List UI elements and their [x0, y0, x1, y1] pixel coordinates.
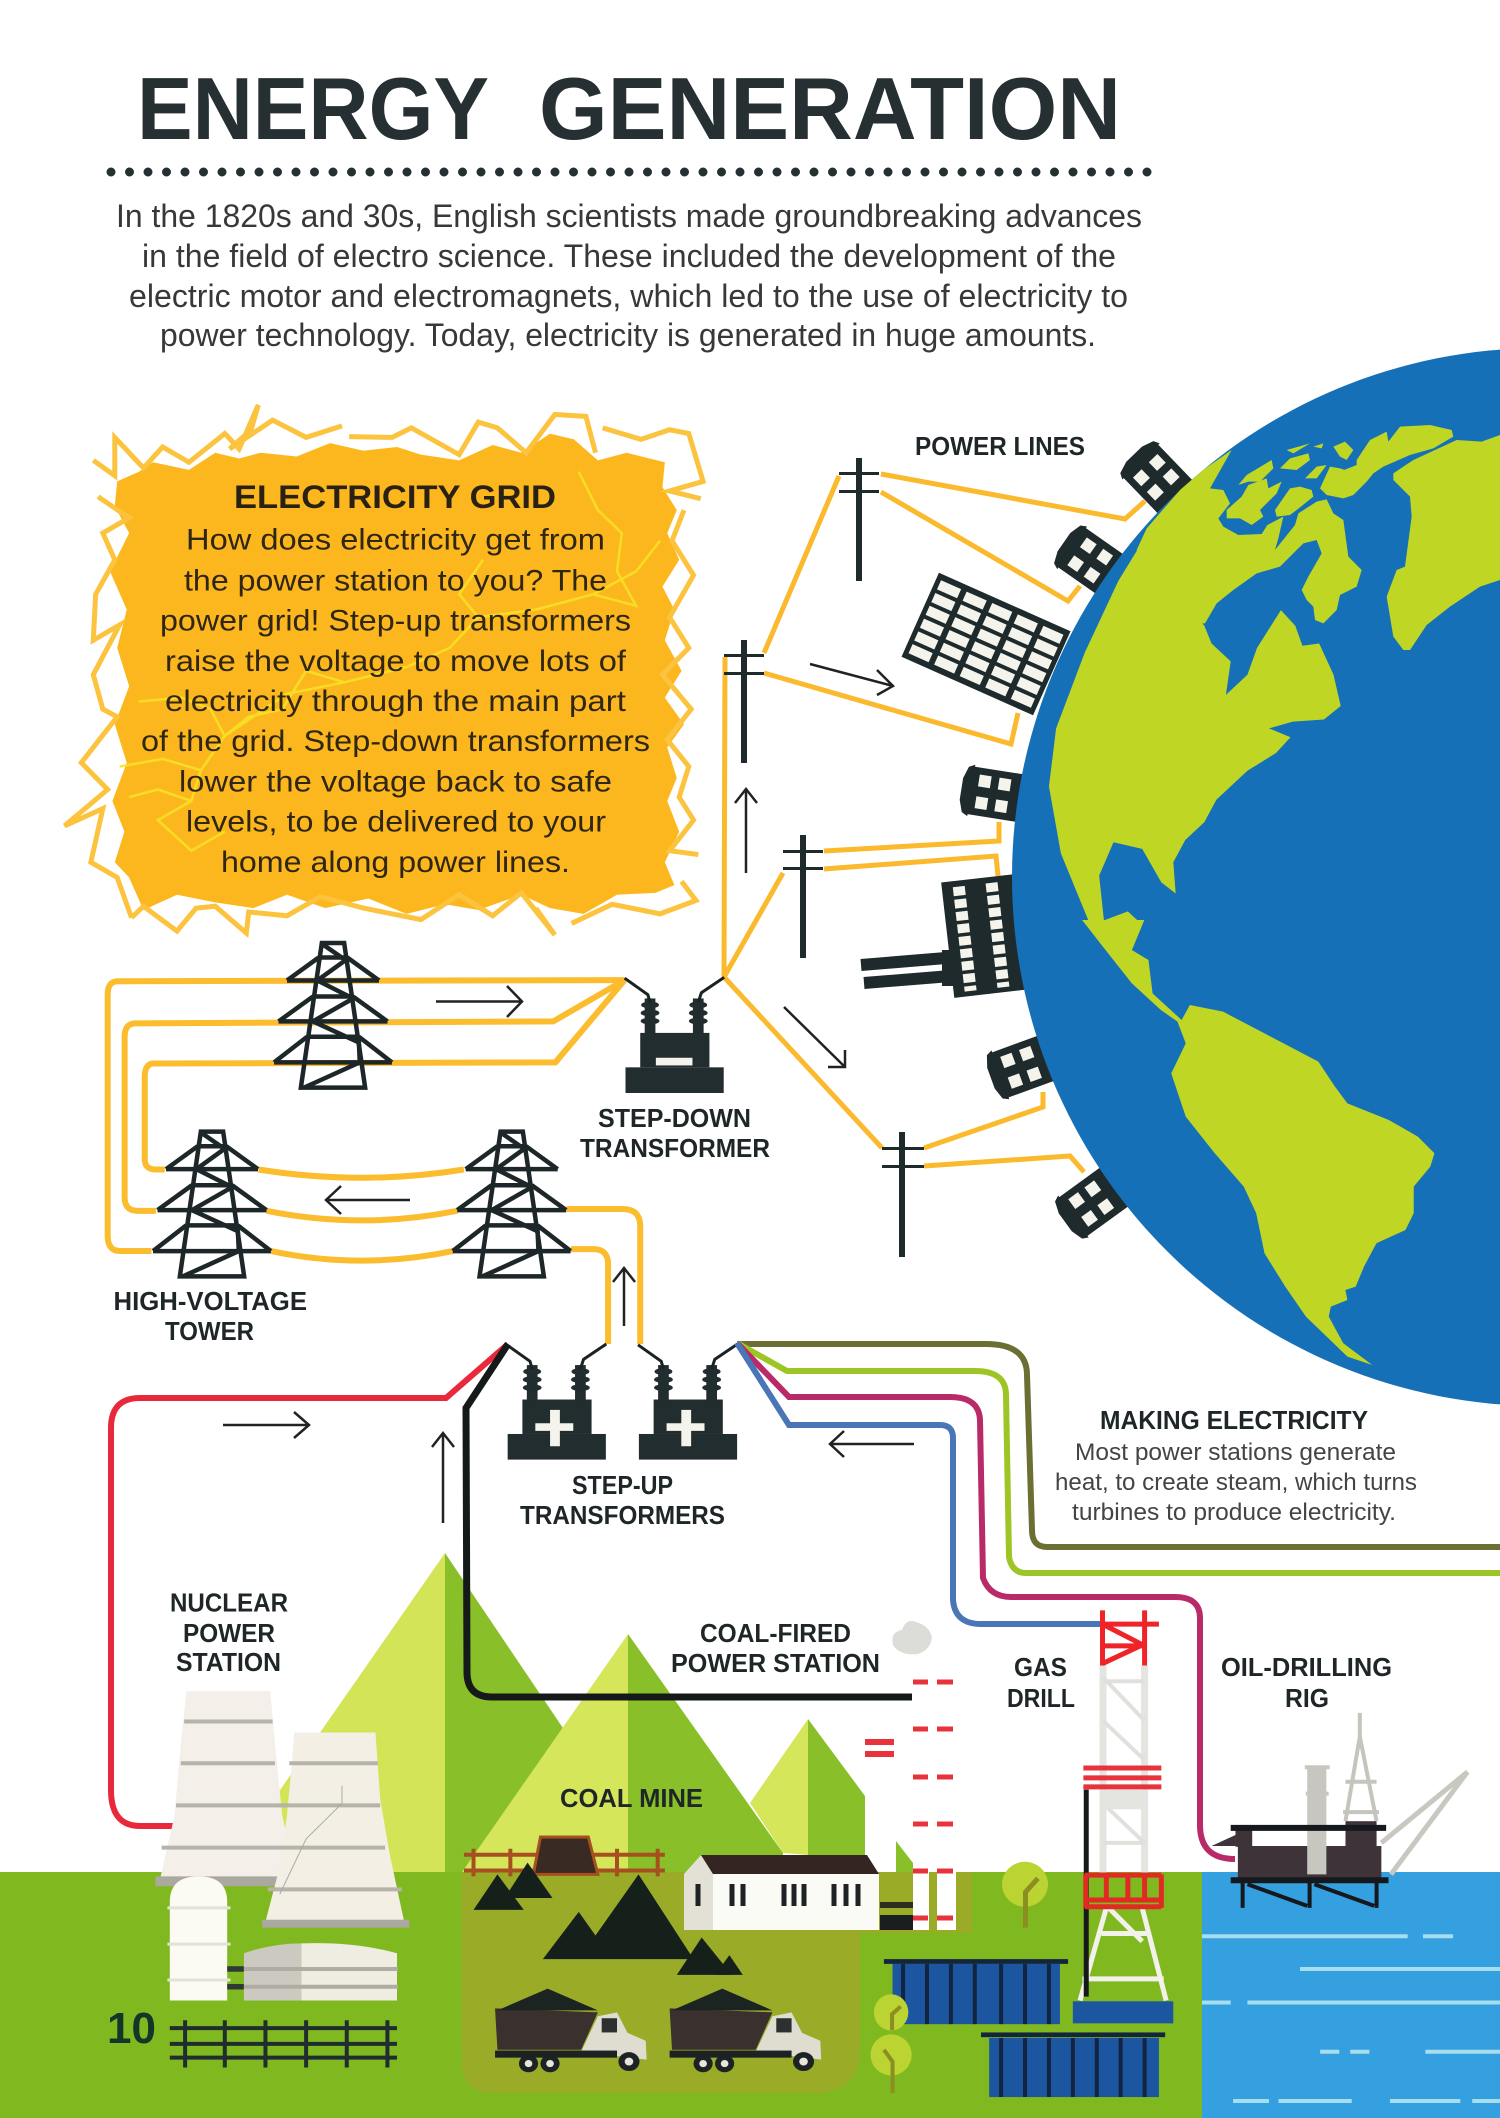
coal heaps: [474, 1863, 743, 1975]
gas drill and oil rig scene: [871, 1610, 1467, 2097]
icon: house 4: [982, 1033, 1057, 1103]
label: step-down transformer: [580, 1103, 770, 1163]
intro text: [116, 198, 1142, 353]
callout body: raise the voltage to move lots of: [165, 645, 627, 678]
title: ENERGY: [137, 59, 489, 158]
icon: house 5: [1050, 1166, 1130, 1243]
buildings around the globe: [861, 436, 1195, 1243]
label: nuclear power station: STATION: [176, 1647, 281, 1677]
chimney: [865, 1673, 956, 1930]
chimney column: [865, 1730, 894, 1856]
callout body: of the grid. Step-down transformers: [141, 725, 650, 758]
callout body: electricity through the main part: [165, 685, 627, 718]
smoke: [892, 1621, 932, 1654]
label: nuclear power station: [170, 1588, 288, 1677]
icon: step-up transformer 1: [507, 1344, 606, 1460]
icon: high-voltage tower 2: [153, 1132, 271, 1276]
Canada, Arctic islands and Greenland: [1137, 425, 1500, 650]
making electricity note: turbines to produce electricity.: [1072, 1499, 1396, 1526]
panel: electricity grid callout: [65, 405, 703, 935]
label: high-voltage tower: HIGH-VOLTAGE: [114, 1286, 307, 1316]
nuclear red line: [111, 1344, 508, 1826]
label: step-up transformers: TRANSFORMERS: [520, 1500, 725, 1530]
intro text: electric motor and electromagnets, which led to the use of electricity to: [129, 278, 1128, 314]
sea: [1202, 1872, 1500, 2118]
icon: office block: [902, 573, 1071, 716]
coal truck 1: [495, 1989, 647, 2072]
globe: [1012, 348, 1500, 1406]
making electricity note: Most power stations generate: [1075, 1439, 1396, 1466]
station building: [684, 1855, 913, 1930]
coal black line: [466, 1344, 912, 1697]
utility poles: [724, 458, 924, 1257]
coal mine ground: [462, 1872, 972, 2093]
label: coal-fired power station: POWER STATION: [671, 1648, 880, 1678]
label: power lines: POWER LINES: [915, 431, 1085, 461]
callout heading: ELECTRICITY GRID: [234, 479, 556, 515]
icon: factory: [861, 872, 1044, 998]
cooling tower back: [155, 1691, 297, 1886]
label: coal mine: COAL MINE: [560, 1783, 703, 1813]
intro text: in the field of electro science. These included the development of the: [142, 238, 1116, 274]
icon: house 3: [957, 763, 1026, 824]
blue line: [737, 1343, 1105, 1624]
icon: high-voltage tower 1: [274, 943, 392, 1088]
mountains: [223, 1553, 913, 1890]
making electricity note: [1055, 1405, 1417, 1526]
lightning box background: [65, 405, 703, 935]
making electricity note: MAKING ELECTRICITY: [1100, 1405, 1368, 1435]
label: step-up transformers: [520, 1470, 725, 1530]
mine shed: [533, 1837, 598, 1874]
label: nuclear power station: POWER: [183, 1618, 275, 1648]
callout body: lower the voltage back to safe: [179, 765, 612, 798]
container 1: [884, 1959, 1068, 2024]
silo: [167, 1876, 231, 2001]
oil rig: [1212, 1713, 1467, 1908]
icon: house 2: [1049, 521, 1129, 598]
gas drill tower: [1073, 1610, 1173, 2023]
tree 2: [874, 1994, 908, 2030]
arrows: [223, 664, 914, 1523]
page number: 10: [107, 2004, 156, 2053]
North America, lower mainland: [1049, 550, 1341, 948]
coal mine: [464, 1837, 821, 2072]
callout body: [141, 524, 650, 879]
tree 1: [1002, 1862, 1048, 1928]
label: high-voltage tower: TOWER: [165, 1316, 254, 1346]
label: coal-fired power station: [671, 1618, 880, 1678]
callout body: levels, to be delivered to your: [186, 806, 606, 839]
brown fence: [464, 1849, 665, 1876]
fence: [170, 2020, 397, 2068]
label: step-down transformer: TRANSFORMER: [580, 1133, 770, 1163]
title: GENERATION: [539, 59, 1121, 158]
label: gas drill: DRILL: [1007, 1683, 1075, 1713]
intro text: In the 1820s and 30s, English scientists made groundbreaking advances: [116, 198, 1142, 234]
callout body: How does electricity get from: [186, 524, 605, 556]
title: [137, 59, 1121, 158]
domed reactor building: [227, 1943, 398, 2001]
callout body: home along power lines.: [221, 846, 570, 879]
Central and South America: [1082, 920, 1434, 1365]
green line: [737, 1343, 1500, 1573]
label: high-voltage tower: [114, 1286, 307, 1346]
label: oil-drilling rig: [1221, 1652, 1392, 1713]
coal-fired power station: [684, 1621, 956, 1930]
label: gas drill: GAS: [1014, 1652, 1067, 1682]
icon: step-up transformer 2: [638, 1344, 738, 1460]
coal truck 2: [670, 1989, 821, 2072]
magenta line: [737, 1343, 1235, 1859]
callout body: power grid! Step-up transformers: [160, 605, 631, 638]
intro text: power technology. Today, electricity is generated in huge amounts.: [160, 317, 1096, 353]
olive line: [737, 1344, 1500, 1547]
label: coal-fired power station: COAL-FIRED: [700, 1618, 851, 1648]
label: step-up transformers: STEP-UP: [572, 1470, 673, 1500]
tree 3: [871, 2034, 912, 2093]
label: gas drill: [1007, 1652, 1075, 1713]
icon: high-voltage tower 3: [453, 1132, 571, 1276]
cooling tower front: [262, 1733, 409, 1928]
callout body: the power station to you? The: [184, 564, 607, 598]
icon: step-down transformer: [625, 977, 724, 1093]
container 2: [981, 2032, 1165, 2097]
label: nuclear power station: NUCLEAR: [170, 1588, 288, 1618]
label: oil-drilling rig: RIG: [1285, 1683, 1329, 1713]
nuclear power station: [155, 1691, 409, 2068]
high-voltage yellow lines: [108, 980, 640, 1344]
distribution power lines: [724, 474, 1145, 1172]
icon: house 1: [1115, 436, 1195, 516]
label: step-down transformer: STEP-DOWN: [598, 1103, 751, 1133]
ground: [0, 1872, 1202, 2118]
label: oil-drilling rig: OIL-DRILLING: [1221, 1652, 1392, 1682]
making electricity note: heat, to create steam, which turns: [1055, 1469, 1417, 1496]
